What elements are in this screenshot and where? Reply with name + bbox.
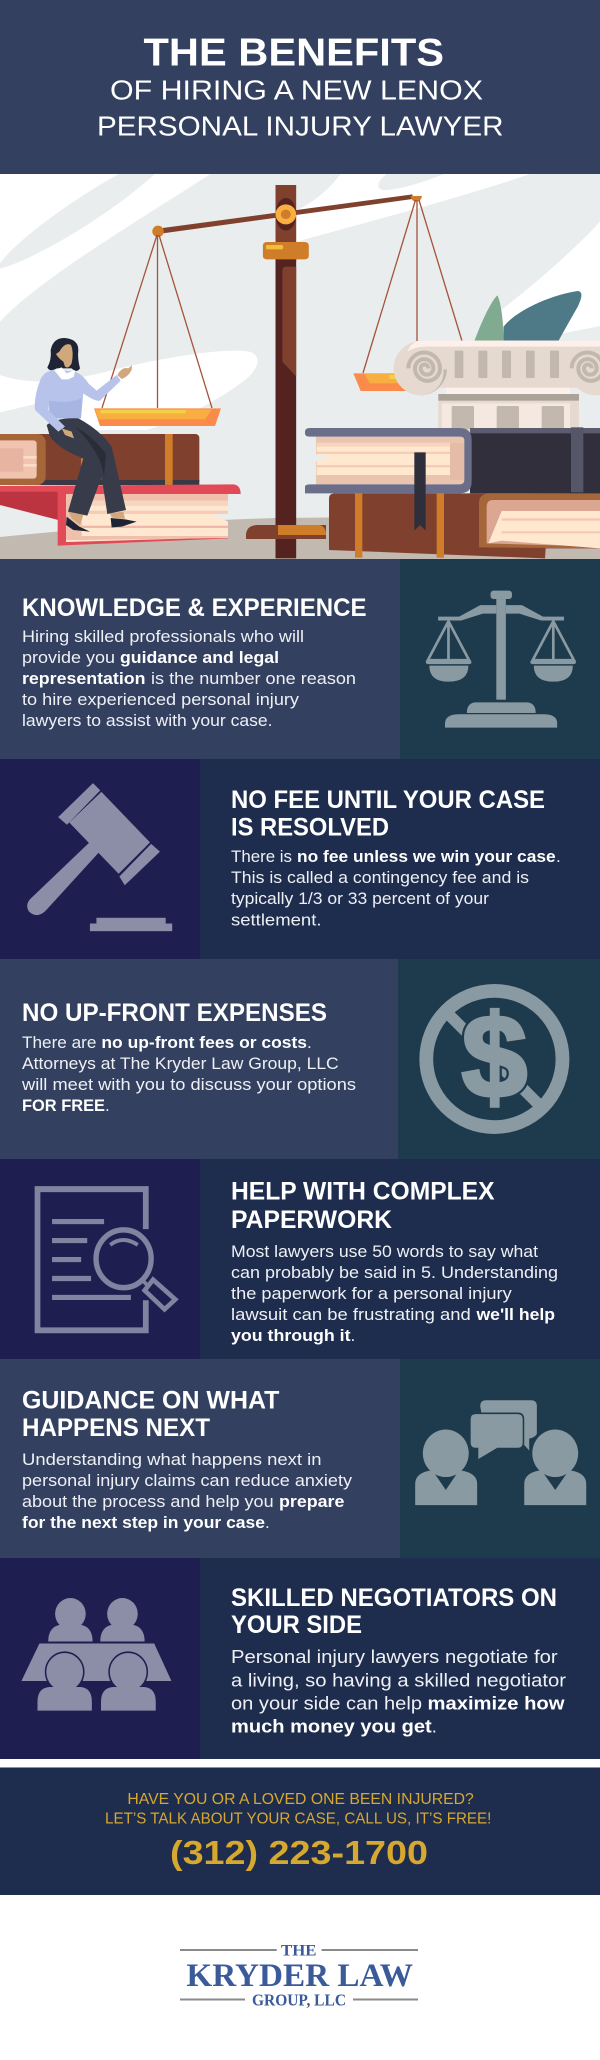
heading: HAPPENS NEXT	[22, 1414, 210, 1442]
right scale pan	[353, 373, 407, 391]
body text: Understanding what happens next in	[22, 1450, 322, 1469]
body text: .	[432, 1716, 437, 1736]
header panel: title	[0, 0, 600, 174]
body text: Most lawyers use 50 words to say what	[231, 1242, 538, 1261]
call to action text: HAVE YOU OR A LOVED ONE BEEN INJURED?	[127, 1791, 474, 1808]
heading: GUIDANCE ON WHAT	[22, 1387, 279, 1415]
panel: guidance on what happens next	[0, 1359, 600, 1558]
icon: gavel	[27, 783, 172, 931]
body text: no up-front fees or costs	[101, 1033, 307, 1052]
body text: for the next step in your case	[22, 1513, 265, 1532]
body text: the paperwork for a personal injury	[231, 1284, 512, 1303]
figure: woman sitting on books	[35, 338, 137, 532]
subtitle line two: PERSONAL INJURY LAWYER	[97, 111, 504, 142]
heading	[22, 1387, 279, 1442]
heading: YOUR SIDE	[231, 1611, 362, 1639]
illustration: lawyer, scales of justice and books	[0, 174, 600, 559]
icon: scales of justice	[426, 591, 576, 728]
body text: settlement.	[231, 910, 322, 930]
body text: .	[307, 1033, 312, 1052]
body text: prepare	[279, 1492, 344, 1511]
illustration background	[0, 174, 600, 559]
phone number: (312) 223-1700	[170, 1834, 428, 1871]
body text: guidance and legal	[120, 648, 279, 667]
scale: post and beam	[102, 185, 462, 558]
heading: KNOWLEDGE & EXPERIENCE	[22, 594, 366, 622]
icon: crossed-out dollar sign	[426, 991, 562, 1127]
body text: a living, so having a skilled negotiator	[231, 1670, 566, 1691]
call to action text: LET’S TALK ABOUT YOUR CASE, CALL US, IT’S FREE!	[105, 1810, 491, 1828]
body text: provide you	[22, 648, 115, 667]
body text: Hiring skilled professionals who will	[22, 627, 304, 646]
body text: about the process and help you	[22, 1492, 274, 1511]
right book stack	[305, 427, 600, 558]
body text: can probably be said in 5. Understanding	[231, 1263, 558, 1282]
body text: is the number one reason	[151, 669, 356, 688]
body text	[21, 1033, 356, 1115]
heading	[231, 1178, 495, 1234]
body text: This is called a contingency fee and is	[231, 868, 529, 887]
body text: Personal injury lawyers negotiate for	[231, 1646, 558, 1667]
heading: SKILLED NEGOTIATORS ON	[231, 1584, 557, 1612]
heading: HELP WITH COMPLEX	[231, 1178, 495, 1206]
body text: representation	[22, 669, 146, 688]
heading: NO UP-FRONT EXPENSES	[22, 999, 327, 1027]
left book stack	[0, 434, 241, 546]
body text	[231, 1242, 558, 1345]
body text	[231, 1646, 566, 1736]
heading: PAPERWORK	[231, 1206, 392, 1234]
logo: The Kryder Law Group, LLC: GROUP, LLC	[252, 1991, 346, 2010]
heading: IS RESOLVED	[231, 814, 389, 842]
greek column capital	[394, 341, 600, 431]
icon: negotiation table with people	[21, 1598, 171, 1711]
body text: you through it	[231, 1326, 351, 1345]
body text: There is	[231, 847, 292, 866]
body text: to hire experienced personal injury	[22, 690, 300, 709]
body text: There are	[22, 1033, 96, 1052]
logo: The Kryder Law Group, LLC: THE	[281, 1943, 316, 1960]
plant leaves	[474, 291, 581, 341]
body text: lawyers to assist with your case.	[22, 711, 272, 730]
body text	[22, 627, 356, 730]
body text: we'll help	[475, 1305, 555, 1324]
panel: knowledge and experience	[0, 559, 600, 759]
icon: crossed-out dollar sign: $	[462, 991, 527, 1123]
body text	[231, 847, 561, 930]
icon: crossed-out dollar sign: $	[462, 991, 527, 1123]
body text: maximize how	[428, 1692, 565, 1714]
panel: no fee until case is resolved	[0, 759, 600, 959]
body text	[22, 1450, 353, 1532]
call to action banner	[0, 1767, 600, 1895]
body text: .	[265, 1513, 270, 1532]
panel: no up-front expenses	[0, 959, 600, 1159]
icon: document with magnifying glass	[37, 1189, 175, 1330]
heading	[231, 786, 545, 842]
body text: lawsuit can be frustrating and	[231, 1305, 471, 1324]
logo: The Kryder Law Group, LLC	[180, 1943, 418, 2010]
body text: .	[350, 1326, 355, 1345]
body text: personal injury claims can reduce anxiety	[22, 1471, 353, 1490]
title: THE BENEFITS	[144, 31, 444, 74]
subtitle line one: OF HIRING A NEW LENOX	[110, 74, 483, 105]
body text: will meet with you to discuss your options	[21, 1075, 356, 1094]
left scale pan	[94, 408, 221, 426]
panel: help with complex paperwork	[0, 1159, 600, 1359]
icon: two people talking	[415, 1400, 586, 1505]
body text: FOR FREE	[22, 1096, 105, 1115]
panel: skilled negotiators	[0, 1558, 600, 1759]
body text: Attorneys at The Kryder Law Group, LLC	[22, 1054, 339, 1073]
body text: much money you get	[231, 1716, 432, 1736]
logo: The Kryder Law Group, LLC: KRYDER LAW	[186, 1958, 413, 1994]
body text: .	[105, 1096, 110, 1115]
call to action text	[105, 1791, 491, 1828]
body text: no fee unless we win your case	[297, 847, 556, 866]
heading: NO FEE UNTIL YOUR CASE	[231, 786, 545, 814]
body text: on your side can help	[231, 1692, 422, 1714]
heading	[231, 1584, 557, 1639]
body text: .	[556, 847, 561, 866]
body text: typically 1/3 or 33 percent of your	[231, 889, 489, 908]
